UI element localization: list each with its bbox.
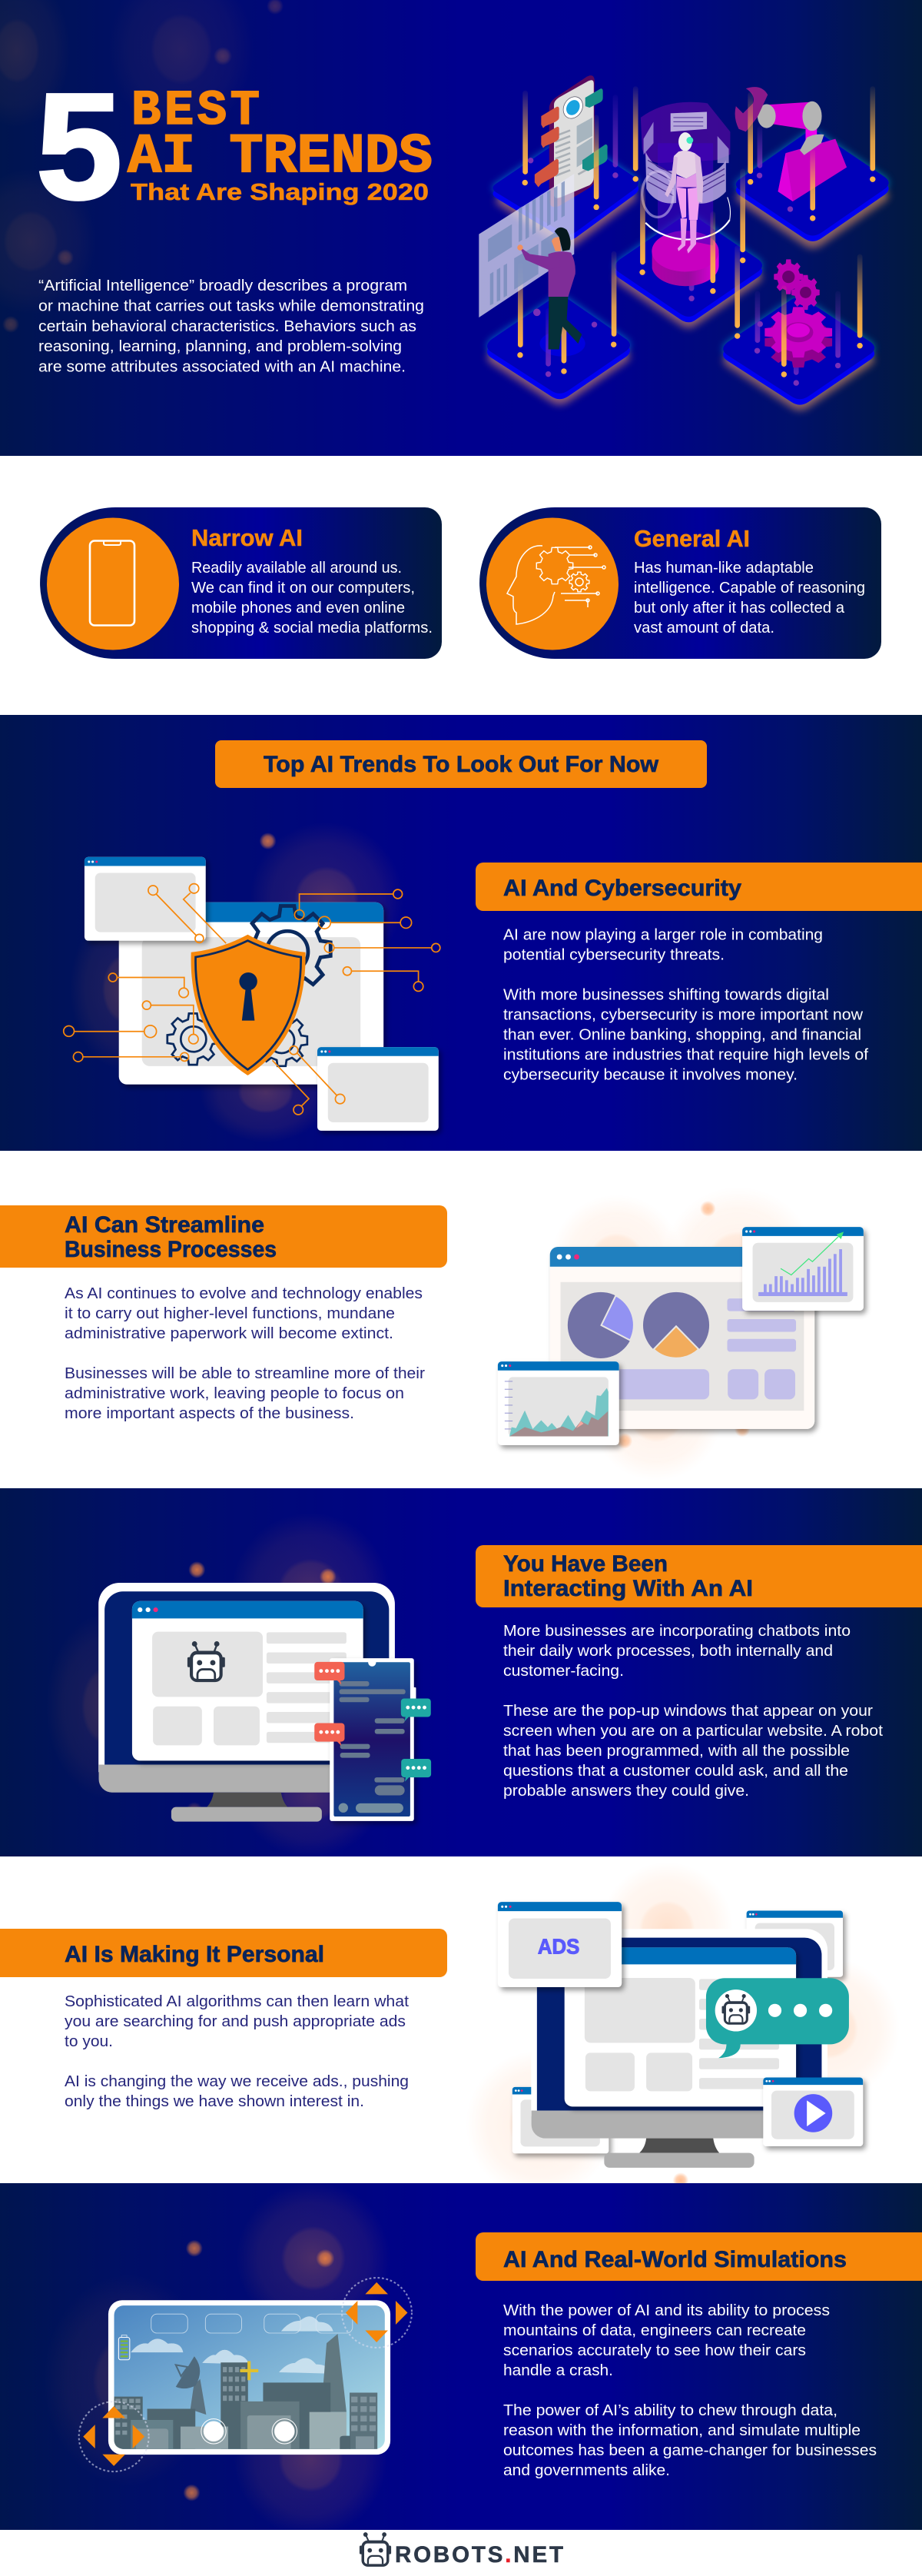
text block: cybersecurity: potential cybersecurity threats.	[503, 946, 725, 964]
text block: streamline: Businesses will be able to streamline more of their	[65, 1364, 425, 1382]
text block: simulations: mountains of data, engineers can recreate	[503, 2322, 806, 2339]
panel: cybersecurity background	[0, 715, 922, 1151]
card text: intelligence. Capable of reasoning	[634, 579, 865, 597]
text block: cybersecurity: institutions are industries that require high levels of	[503, 1045, 868, 1064]
text block: chatbots: probable answers they could give.	[503, 1782, 749, 1800]
illustration: real-world simulation	[44, 2182, 412, 2537]
monitor	[98, 1583, 396, 1822]
heading: AI And Cybersecurity: AI And Cybersecurity	[503, 876, 741, 901]
orange light bars	[518, 86, 875, 367]
illustration: person at holographic panel	[479, 174, 582, 349]
heading: You Have Been Interacting: Interacting With An AI	[503, 1576, 753, 1601]
text block: streamline: more important aspects of the business.	[65, 1404, 354, 1422]
text block: intro: are some attributes associated with an AI machine.	[38, 358, 406, 375]
text block: streamline	[65, 1285, 425, 1422]
window: main dashboard	[550, 1247, 814, 1429]
title	[36, 62, 433, 231]
illustration: smartphone with chat bubbles	[535, 75, 608, 207]
text block: cybersecurity	[503, 926, 868, 1084]
title: AI TRENDS	[128, 125, 433, 188]
text block: streamline: As AI continues to evolve and technology enables	[65, 1285, 423, 1302]
text block: personal: you are searching for and push appropriate ads	[65, 2013, 406, 2030]
hero isometric illustration	[479, 75, 889, 410]
d-pad: bottom left	[79, 2401, 149, 2471]
card text: mobile phones and even online	[191, 599, 405, 617]
text block: cybersecurity: With more businesses shifting towards digital	[503, 986, 829, 1004]
heading: AI Can Streamline: AI Can Streamline	[65, 1212, 264, 1238]
phone chat	[330, 1658, 416, 1821]
text block: chatbots: screen when you are on a particular website. A robot	[503, 1722, 883, 1740]
panel: General AI card	[479, 507, 881, 659]
city scene	[114, 2305, 385, 2449]
orange light dots	[517, 176, 875, 377]
card text: Narrow AI	[191, 524, 303, 551]
text block: streamline: administrative paperwork will become extinct.	[65, 1325, 393, 1342]
platform: bottom right	[723, 297, 874, 410]
bokeh: hero glows	[0, 0, 284, 333]
icon: orange circle with phone	[47, 518, 179, 650]
text block: intro: “Artificial Intelligence” broadly describes a program	[38, 277, 407, 294]
heading: AI And Cybersecurity	[476, 863, 922, 911]
text block: streamline: administrative work, leaving people to focus on	[65, 1384, 404, 1402]
heading: You Have Been Interacting	[476, 1545, 922, 1607]
title: That Are Shaping 2020	[131, 178, 429, 205]
window: video	[763, 2077, 863, 2146]
heading: AI And Real-World Simulations	[476, 2232, 922, 2281]
text block: personal: to you.	[65, 2033, 113, 2050]
pie charts	[568, 1292, 709, 1358]
platform: centre	[615, 215, 762, 328]
chat bubbles	[314, 1662, 431, 1782]
window: main	[119, 902, 383, 1085]
text block: chatbots: their daily work processes, both internally and	[503, 1642, 833, 1660]
window: ADS	[498, 1902, 622, 1987]
bokeh glows	[550, 1187, 815, 1481]
heading: AI Can Streamline	[0, 1205, 447, 1268]
text block: cybersecurity: transactions, cybersecurity is more important now	[503, 1005, 863, 1024]
card text: vast amount of data.	[634, 619, 774, 637]
heading: You Have Been Interacting: You Have Been	[503, 1551, 668, 1577]
shield with keyhole	[191, 935, 306, 1075]
bokeh glows	[70, 822, 403, 1142]
illustration: cybersecurity shield	[64, 822, 440, 1142]
text block: cybersecurity: AI are now playing a larger role in combating	[503, 926, 823, 944]
illustration: gears	[764, 259, 832, 367]
window: bottom right	[317, 1047, 439, 1131]
bokeh glows	[466, 1862, 900, 2199]
panel: chatbot background	[0, 1488, 922, 1856]
text block: intro	[38, 277, 424, 375]
text block: simulations: The power of AI’s ability to chew through data,	[503, 2401, 837, 2419]
platform: bottom left	[487, 296, 630, 405]
title: 5	[36, 62, 122, 231]
card text	[191, 524, 433, 637]
text block: cybersecurity: cybersecurity because it involves money.	[503, 1065, 798, 1084]
circuit lines	[64, 884, 440, 1115]
platform: top left	[493, 137, 638, 248]
text block: intro: reasoning, learning, planning, and problem-solving	[38, 337, 402, 355]
platform: top right	[736, 131, 889, 248]
bokeh glows	[46, 1513, 390, 1856]
crosshair	[240, 2362, 258, 2380]
card text: Readily available all around us.	[191, 559, 402, 577]
text block: chatbots: These are the pop-up windows that appear on your	[503, 1702, 873, 1720]
fire buttons	[201, 2419, 297, 2444]
game screen frame	[108, 2300, 390, 2455]
text block: simulations	[503, 2302, 877, 2479]
text block: chatbots	[503, 1622, 883, 1800]
card text: but only after it has collected a	[634, 599, 845, 617]
text block: simulations: outcomes has been a game-changer for businesses	[503, 2441, 877, 2459]
window: bar chart	[742, 1227, 864, 1311]
illustration: robot arm	[735, 87, 847, 201]
icon: orange circle with AI head	[486, 518, 619, 650]
HUD buttons	[151, 2314, 353, 2333]
text block: cybersecurity: than ever. Online banking, shopping, and financial	[503, 1025, 861, 1044]
monitor	[531, 1929, 827, 2168]
heading: AI And Real-World Simulations: AI And Real-World Simulations	[503, 2247, 847, 2272]
heading: top trends button	[215, 740, 707, 788]
panel: Narrow AI card	[40, 507, 442, 659]
footer logo	[360, 2532, 563, 2568]
footer logo: ROBOTS.NET	[395, 2542, 563, 2568]
text block: simulations: scenarios accurately to see how their cars	[503, 2342, 806, 2359]
text block: personal: Sophisticated AI algorithms can then learn what	[65, 1993, 409, 2010]
text block: personal	[65, 1993, 409, 2110]
purple light bars	[528, 95, 841, 386]
panel: footer background	[0, 2530, 922, 2576]
card text: Has human-like adaptable	[634, 559, 814, 577]
chat bubble with robot	[706, 1978, 849, 2058]
browser window	[132, 1601, 363, 1760]
title: BEST	[131, 84, 260, 139]
battery	[118, 2335, 130, 2360]
illustration: android in hologram	[641, 102, 730, 286]
card text: General AI	[634, 525, 750, 552]
icon: robot	[187, 1641, 225, 1682]
text block: intro: certain behavioral characteristics. Behaviors such as	[38, 317, 416, 335]
text block: personal: AI is changing the way we receive ads., pushing	[65, 2072, 409, 2090]
text block: simulations: handle a crash.	[503, 2362, 613, 2379]
card text: shopping & social media platforms.	[191, 619, 433, 637]
bokeh glows	[44, 2182, 390, 2537]
illustration: chatbot on desktop	[46, 1513, 431, 1856]
card text: We can find it on our computers,	[191, 579, 415, 597]
window: ADS: ADS	[538, 1935, 579, 1959]
text block: chatbots: questions that a customer could ask, and all the	[503, 1762, 848, 1780]
text block: personal: only the things we have shown interest in.	[65, 2092, 364, 2110]
d-pad: top right	[342, 2278, 412, 2348]
icon: robot logo	[360, 2532, 391, 2567]
text block: intro: or machine that carries out tasks while demonstrating	[38, 297, 424, 315]
panel: streamline background	[0, 1151, 922, 1488]
window: area chart	[498, 1361, 619, 1445]
back windows	[512, 1910, 843, 2153]
text block: streamline: it to carry out higher-level functions, mundane	[65, 1305, 395, 1322]
heading: AI Is Making It Personal	[0, 1929, 447, 1977]
card text	[634, 525, 865, 637]
text block: simulations: With the power of AI and its ability to process	[503, 2302, 830, 2319]
gears	[167, 906, 330, 1066]
text block: chatbots: customer-facing.	[503, 1662, 624, 1680]
panel: simulations background	[0, 2183, 922, 2530]
panel: definitions background	[0, 456, 922, 715]
panel: personal ads background	[0, 1856, 922, 2183]
text block: simulations: and governments alike.	[503, 2461, 670, 2479]
text block: chatbots: More businesses are incorporating chatbots into	[503, 1622, 851, 1640]
text block: simulations: reason with the information, and simulate multiple	[503, 2421, 861, 2439]
illustration: analytics dashboard	[498, 1187, 864, 1481]
heading: AI Can Streamline: Business Processes	[65, 1237, 277, 1262]
window: top left	[85, 857, 206, 941]
text block: chatbots: that has been programmed, with all the possible	[503, 1742, 850, 1760]
illustration: personalised ads	[466, 1862, 900, 2199]
heading: AI Is Making It Personal: AI Is Making It Personal	[65, 1942, 324, 1967]
panel: hero background	[0, 0, 922, 456]
heading: top trends button: Top AI Trends To Look Out For Now	[264, 752, 659, 777]
